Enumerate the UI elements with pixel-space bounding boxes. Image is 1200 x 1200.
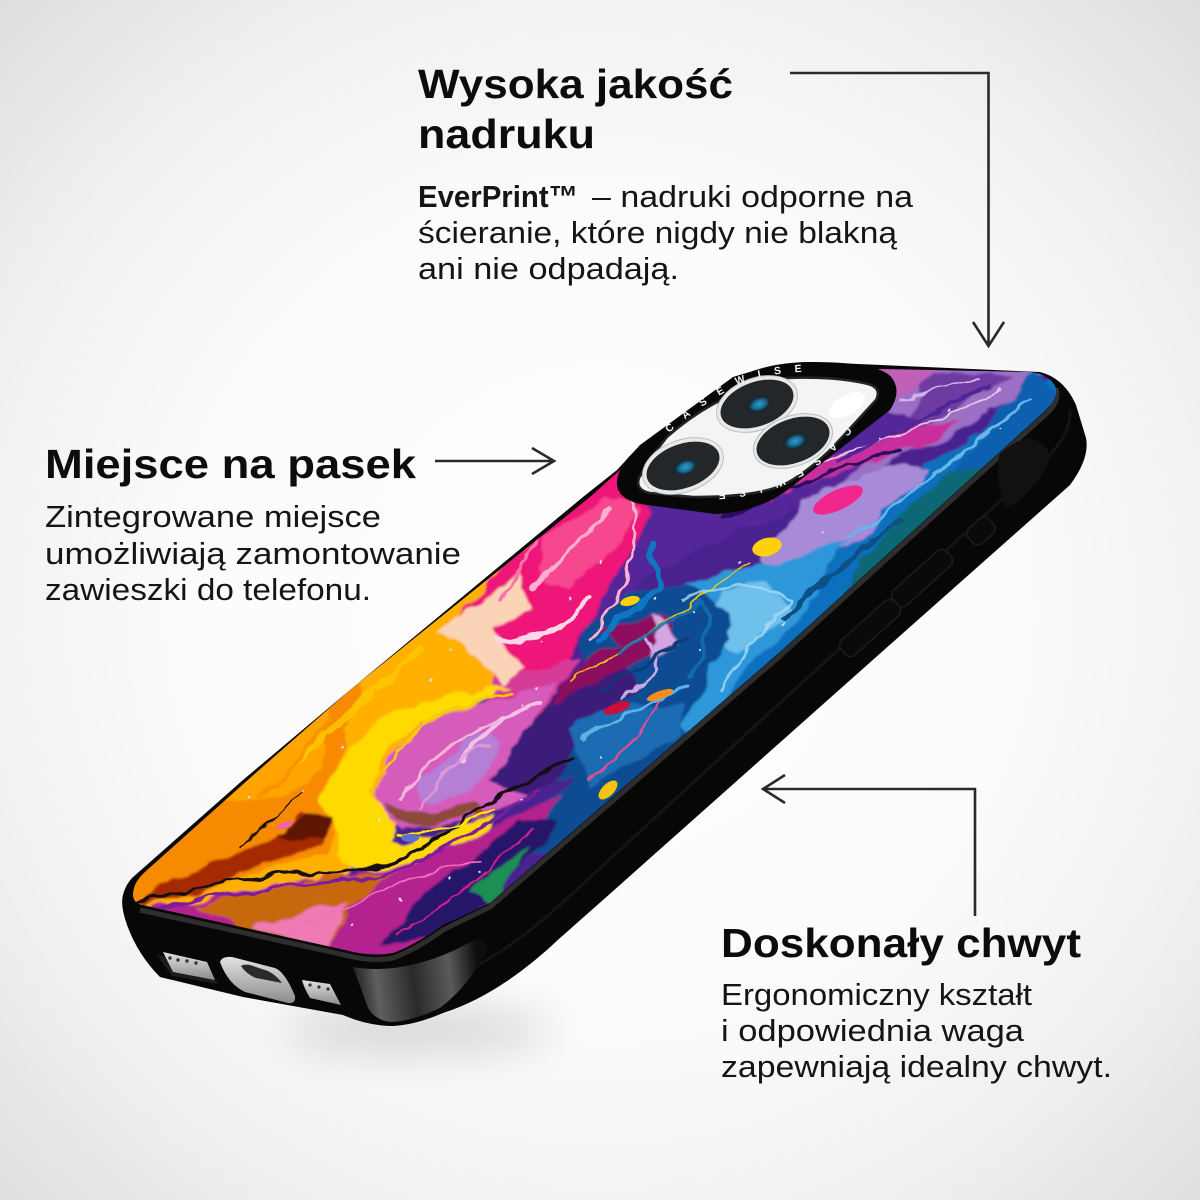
lens left: [635, 427, 731, 505]
USB port: [220, 957, 295, 1003]
lilac mid: [760, 470, 925, 590]
description: ścieranie, które nigdy nie blakną: [418, 216, 897, 250]
phone shadow: [285, 1010, 555, 1050]
ring lettering top: CASEWISE: [666, 364, 802, 432]
pink to purple link: [486, 657, 582, 719]
camera island: [616, 362, 897, 514]
navy: [490, 660, 640, 800]
flash highlight: [825, 386, 869, 424]
arrow: [790, 73, 1004, 346]
heading: Doskonały chwyt: [721, 920, 1081, 966]
description: i odpowiednia waga: [721, 1014, 1024, 1048]
arrow: [763, 775, 975, 916]
description: [418, 180, 913, 286]
dark red patch: [130, 810, 330, 910]
green lower: [465, 850, 530, 905]
orange left: [133, 683, 362, 905]
description: umożliwiają zamontowanie: [45, 537, 461, 571]
description: Ergonomiczny kształt: [721, 978, 1033, 1012]
bottom corner highlight: [353, 938, 488, 1022]
description: [45, 500, 461, 607]
heading: [418, 61, 733, 157]
teal streak: [843, 467, 983, 594]
navy lower: [380, 820, 560, 945]
right speaker grille: [302, 980, 341, 1005]
lens right: [746, 403, 840, 479]
heading: nadruku: [418, 111, 595, 157]
specks: [250, 410, 1000, 925]
callout: print quality: [418, 61, 1004, 346]
description: zapewniają idealny chwyt.: [721, 1050, 1112, 1084]
heading: Wysoka jakość: [418, 61, 733, 107]
peach: [440, 575, 530, 690]
callout: grip: [721, 775, 1112, 1084]
case body silhouette: [122, 362, 1087, 1026]
pink violet band: [760, 420, 960, 500]
description: [721, 978, 1112, 1084]
marble base: [346, 374, 1050, 908]
phone case: [122, 362, 1087, 1026]
description: – nadruki odporne na: [592, 180, 913, 214]
description: zawieszki do telefonu.: [45, 573, 371, 607]
lower magenta: [146, 793, 565, 954]
heading: Miejsce na pasek: [45, 441, 416, 487]
arrow: [435, 448, 554, 474]
description: Zintegrowane miejsce: [45, 500, 381, 534]
blue right: [682, 378, 1056, 735]
description: EverPrint™: [418, 180, 578, 214]
glossy bumper rim: [140, 388, 1057, 959]
callout: strap slot: [45, 441, 554, 607]
maroon swirl: [555, 616, 672, 700]
colored drops: [276, 480, 867, 842]
purple band: [592, 411, 922, 626]
camera ring: [617, 362, 897, 514]
marble artwork: [133, 369, 1056, 954]
deep blue swirl: [528, 582, 732, 856]
lower orange pink: [190, 870, 400, 945]
swirl pink: [375, 680, 560, 832]
marble streaks: [134, 380, 1030, 930]
description: ani nie odpadają.: [418, 252, 679, 286]
side buttons: [837, 438, 1050, 660]
gold left underlay: [142, 542, 534, 907]
lilac upper right: [840, 370, 1043, 484]
camera window: [638, 378, 878, 497]
pink top: [458, 470, 653, 674]
lens top: [709, 365, 805, 443]
ring lettering bottom: CASEWISE: [719, 428, 851, 500]
yellow centre: [322, 690, 510, 870]
light blue: [680, 539, 850, 732]
left speaker grille: [157, 952, 218, 984]
